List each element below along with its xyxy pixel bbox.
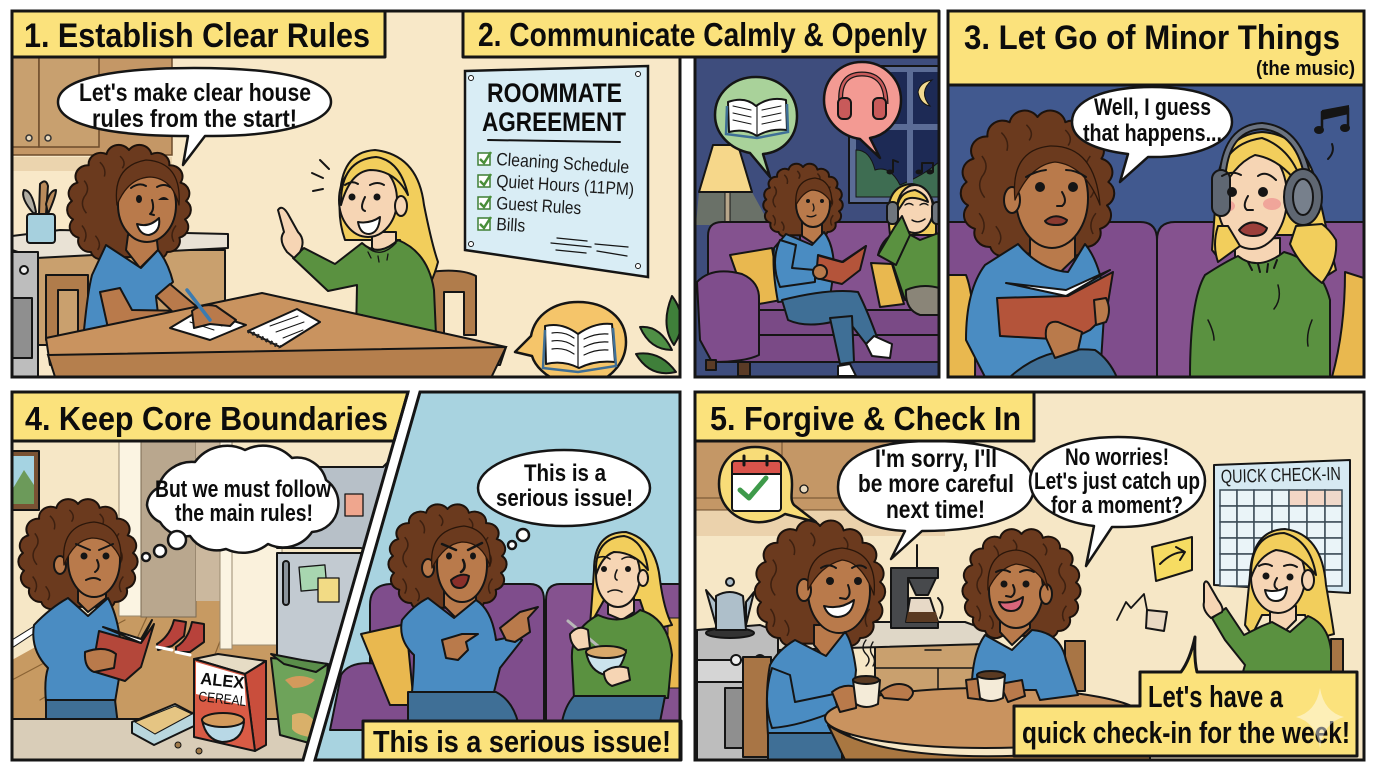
poster: roommate agreement: ROOMMATE — [487, 78, 622, 108]
panel 1 and 2: establish clear rules and roommate agreement room — [12, 11, 682, 382]
fridge — [277, 460, 390, 665]
blonde woman eating cereal — [562, 532, 672, 722]
speech bubble: no worries: Let's just catch up — [1034, 468, 1200, 495]
sticky note with arrow — [1152, 537, 1192, 581]
blonde woman pointing — [278, 150, 438, 336]
round wooden table — [825, 688, 1150, 768]
heading: let go of minor things — [948, 11, 1364, 85]
green thought bubble with book — [715, 77, 797, 177]
speech bubble: sorry: next time! — [886, 496, 985, 524]
floor lamp — [696, 145, 770, 225]
pink thought bubble with headphones — [824, 62, 901, 158]
blonde woman pointing — [1204, 529, 1334, 675]
speech bubble: serious issue: serious issue! — [496, 485, 633, 512]
sparkle watermark — [1296, 688, 1344, 748]
brunette woman arguing — [388, 504, 538, 722]
panel 4: keep core boundaries, kitchen side — [8, 392, 412, 764]
notepad and spiral notebook — [170, 290, 320, 347]
icon bubble: open book — [515, 302, 626, 382]
torn note and scribble — [1117, 594, 1167, 631]
speech bubble: clear house rules: Let's make clear house — [79, 79, 311, 107]
speech bubble: sorry: I'm sorry, I'll — [875, 445, 997, 473]
panel 3: let go of minor things — [948, 11, 1370, 380]
thought cloud: follow the main rules — [142, 446, 338, 561]
icon bubble: calendar check — [719, 447, 816, 522]
heading: let go of minor things: (the music) — [1256, 58, 1355, 80]
night window — [849, 66, 941, 203]
blonde woman with headphones — [878, 184, 945, 315]
panel 5: forgive and check in — [695, 392, 1364, 768]
purple couch — [948, 222, 1370, 380]
speech bubble: well I guess — [1072, 87, 1232, 182]
brunette woman reading — [763, 164, 892, 376]
panel 4: serious talk on sofa — [310, 392, 690, 762]
first brunette woman with mug — [755, 520, 885, 765]
poster: roommate agreement: Quiet Hours (11PM) — [496, 171, 635, 199]
emphasis lines — [312, 160, 329, 191]
wall picture — [14, 450, 40, 511]
chairs — [743, 639, 1343, 757]
purple sofa — [697, 222, 945, 376]
panel 2: night living room scene — [695, 57, 945, 377]
speech bubble: serious issue — [478, 450, 650, 549]
poster: roommate agreement: AGREEMENT — [482, 107, 626, 137]
thought cloud: follow the main rules: the main rules! — [175, 500, 313, 527]
speech bubble: clear house rules: rules from the start! — [92, 105, 297, 133]
speech bubble: sorry: be more careful — [858, 470, 1014, 498]
music note — [1314, 105, 1350, 159]
stove and kettle — [697, 578, 778, 765]
poster: roommate agreement: Cleaning Schedule — [496, 149, 630, 177]
speech bubble: clear house rules — [58, 68, 331, 165]
heading: communicate calmly and openly: 2. Communicate Calmly & Openly — [478, 16, 928, 53]
counter and stove — [12, 230, 228, 382]
speech bubble: serious issue: This is a — [524, 460, 607, 487]
kitchen cabinets — [12, 50, 172, 171]
poster: roommate agreement — [465, 66, 648, 277]
wall calendar: quick check-in: QUICK CHECK-IN — [1221, 464, 1341, 488]
speech bubble: no worries — [1030, 437, 1205, 566]
thought cloud: follow the main rules: But we must follow — [155, 476, 331, 503]
counter and cereal mess — [12, 654, 328, 764]
caption: quick check-in for the week: Let's have a — [1148, 679, 1284, 714]
poster: roommate agreement: Guest Rules — [496, 193, 582, 218]
plant leaves — [636, 296, 682, 373]
red sneakers — [157, 620, 204, 655]
table back chairs — [46, 271, 476, 340]
kitchen cabinets and counter — [695, 441, 987, 696]
coffee maker — [891, 545, 943, 628]
speech bubble: well I guess: that happens... — [1083, 120, 1222, 147]
caption: this is a serious issue: This is a serious issue! — [373, 724, 671, 759]
caption: quick check-in for the week — [1014, 637, 1357, 756]
alex cereal box: CEREAL — [198, 688, 247, 709]
heading: let go of minor things: 3. Let Go of Minor Things — [964, 19, 1340, 57]
speech bubble: no worries: for a moment? — [1051, 492, 1183, 519]
utensil jar — [23, 181, 56, 243]
heading: establish clear rules: 1. Establish Clear Rules — [24, 17, 370, 55]
purple sofa — [330, 584, 690, 730]
speech bubble: well I guess: Well, I guess — [1094, 94, 1211, 121]
alex cereal box — [194, 654, 266, 751]
brunette woman with book — [961, 111, 1118, 380]
speech bubble: no worries: No worries! — [1065, 444, 1169, 471]
mugs and hands — [832, 640, 1025, 712]
heading: keep core boundaries: 4. Keep Core Boundaries — [25, 400, 388, 437]
second brunette woman with mug — [962, 529, 1081, 700]
heading: forgive and check in: 5. Forgive & Check In — [710, 400, 1021, 437]
speech bubble: sorry — [838, 441, 1034, 559]
poster: roommate agreement: Bills — [496, 214, 526, 236]
wooden table — [46, 293, 506, 380]
door and hallway — [12, 441, 300, 720]
brunette woman writing — [67, 145, 197, 330]
gap between room and night scene — [682, 58, 694, 380]
wall calendar: quick check-in — [1214, 460, 1350, 593]
blonde woman with headphones, worried — [1190, 126, 1336, 377]
alex cereal box: ALEX — [200, 669, 246, 693]
blue sweater brunette with book, annoyed — [18, 499, 154, 725]
